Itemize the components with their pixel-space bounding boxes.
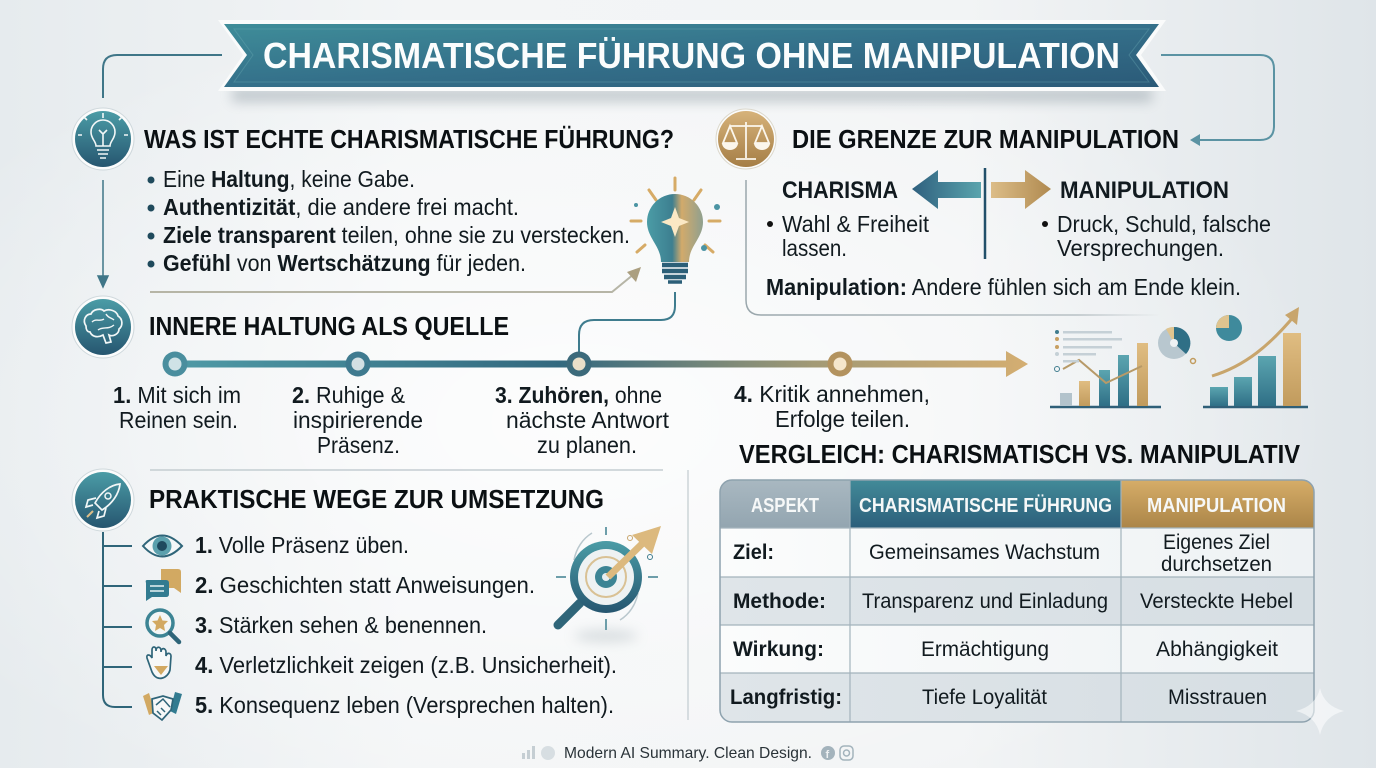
heading: PRAKTISCHE WEGE ZUR UMSETZUNG: [149, 484, 604, 514]
row: Wirkung: [733, 637, 1278, 661]
icon: target with magnifier and arrow: [556, 526, 661, 642]
icon: open hand: [147, 647, 171, 678]
row: Methode: Transparenz und Einladung: [862, 589, 1108, 613]
heading: INNERE HALTUNG ALS QUELLE: [149, 311, 509, 341]
panel: innere Haltung als Quelle: [72, 296, 1028, 458]
timeline: [162, 351, 1028, 377]
step 3: [495, 382, 670, 458]
item 5: 5. Konsequenz leben (Versprechen halten).: [195, 692, 614, 718]
icon: sparkle watermark: [1296, 688, 1344, 735]
step 4: Erfolge teilen.: [775, 406, 910, 432]
icon: glowing light bulb: [631, 178, 720, 282]
footer text: Modern AI Summary. Clean Design.: [564, 745, 812, 762]
text: charisma bullet: lassen.: [782, 235, 847, 261]
heading: comparison: VERGLEICH: CHARISMATISCH VS. MANIPULATIV: [739, 439, 1301, 469]
title: CHARISMATISCHE FÜHRUNG OHNE MANIPULATION: [263, 35, 1120, 76]
row: Methode: Versteckte Hebel: [1140, 589, 1293, 613]
footer: [522, 745, 853, 762]
step 1: Reinen sein.: [119, 407, 238, 433]
step 4: [734, 381, 930, 432]
icon: facebook: f: [826, 749, 830, 761]
bullet list: Authentizität, die andere frei macht.: [163, 194, 519, 220]
arrow: to light bulb: [150, 267, 641, 292]
heading: WAS IST ECHTE CHARISMATISCHE FÜHRUNG?: [144, 124, 674, 154]
icon: handshake: [143, 692, 182, 720]
text: manipulation summary: Manipulation: Andere fühlen sich am Ende klein.: [766, 274, 1241, 300]
icon: speech bubbles: [146, 569, 181, 601]
connector: banner to manipulation section: [1161, 55, 1274, 140]
bullet list: Gefühl von Wertschätzung für jeden.: [163, 250, 526, 276]
panel outline: [746, 180, 1160, 315]
connector: banner to first section: [103, 55, 222, 98]
bullet list: Eine Haltung, keine Gabe.: [163, 166, 415, 192]
icon: left bar chart: [1050, 327, 1196, 407]
tree connector: [103, 532, 132, 707]
table header: MANIPULATION: [1147, 494, 1286, 517]
step 3: 3. Zuhören, ohne: [495, 382, 662, 408]
icon: right bar chart: [1203, 307, 1308, 407]
item 4: 4. Verletzlichkeit zeigen (z.B. Unsicherheit).: [195, 652, 617, 678]
row: Ziel: Gemeinsames Wachstum: [869, 540, 1100, 564]
table: comparison: [720, 480, 1314, 722]
row: Wirkung: Wirkung:: [733, 637, 824, 661]
label: manipulation: MANIPULATION: [1060, 177, 1229, 204]
divider: [984, 168, 986, 259]
row: Ziel: durchsetzen: [1161, 552, 1272, 576]
text: manipulation bullet: Druck, Schuld, falsche: [1057, 211, 1271, 237]
panel: was ist echte charismatische Führung: [72, 108, 674, 276]
text: charisma bullet: Wahl & Freiheit: [782, 211, 929, 237]
step 2: 2. Ruhige &: [292, 382, 405, 408]
row: Methode: [733, 589, 1293, 613]
arrow: left: [912, 170, 981, 209]
step 2: Präsenz.: [317, 432, 400, 458]
connector: first section to second section: [98, 180, 108, 287]
step 1: [113, 382, 241, 433]
icon: facebook: [821, 746, 835, 761]
item 3: [147, 610, 487, 642]
item 2: [146, 569, 535, 601]
row: Langfristig: Tiefe Loyalität: [922, 685, 1047, 709]
panel: praktische Wege zur Umsetzung: [72, 469, 617, 720]
step 1: 1. Mit sich im: [113, 382, 241, 408]
step 3: zu planen.: [537, 432, 637, 458]
item 1: 1. Volle Präsenz üben.: [195, 532, 409, 558]
table header: ASPEKT: [751, 494, 819, 517]
step 4: 4. Kritik annehmen,: [734, 381, 930, 407]
label: charisma: CHARISMA: [782, 177, 898, 204]
connector: light bulb to timeline step 3: [579, 292, 675, 353]
row: Ziel: Ziel:: [733, 540, 774, 564]
icon: instagram: [840, 746, 853, 760]
row: Methode: Methode:: [733, 589, 826, 613]
row: Langfristig: Langfristig:: [730, 685, 842, 709]
step 3: nächste Antwort: [506, 407, 670, 433]
row: Ziel: Eigenes Ziel: [1163, 530, 1270, 554]
table header: CHARISMATISCHE FÜHRUNG: [859, 494, 1112, 517]
icon: eye: [143, 536, 182, 556]
icon: footer dot: [541, 746, 555, 760]
item 2: 2. Geschichten statt Anweisungen.: [195, 572, 535, 598]
row: Ziel: [733, 530, 1272, 576]
icon: brain badge: [72, 296, 134, 358]
text: charisma bullet: [767, 211, 929, 261]
row: Wirkung: Abhängigkeit: [1156, 637, 1278, 661]
icon: rocket badge: [72, 469, 134, 531]
arrowhead: manipulation section: [1190, 134, 1200, 146]
icon: scales badge: [716, 109, 776, 169]
arrow: right: [991, 170, 1051, 209]
item 3: 3. Stärken sehen & benennen.: [195, 612, 487, 638]
icon: footer bars: [522, 746, 535, 759]
table header: [751, 494, 1286, 517]
bullet list: [148, 166, 630, 276]
row: Langfristig: [730, 685, 1267, 709]
heading: DIE GRENZE ZUR MANIPULATION: [792, 124, 1179, 154]
step 2: inspirierende: [293, 407, 423, 433]
icon: magnifier with star: [147, 610, 179, 642]
text: manipulation bullet: Versprechungen.: [1057, 235, 1224, 261]
step 2: [292, 382, 423, 458]
row: Langfristig: Misstrauen: [1168, 685, 1267, 709]
row: Wirkung: Ermächtigung: [921, 637, 1049, 661]
text: manipulation bullet: [1042, 211, 1271, 261]
panel: die Grenze zur Manipulation: [716, 109, 1271, 315]
title banner: [218, 20, 1166, 102]
icon: light bulb badge: [72, 108, 134, 170]
bullet list: Ziele transparent teilen, ohne sie zu verstecken.: [163, 222, 630, 248]
